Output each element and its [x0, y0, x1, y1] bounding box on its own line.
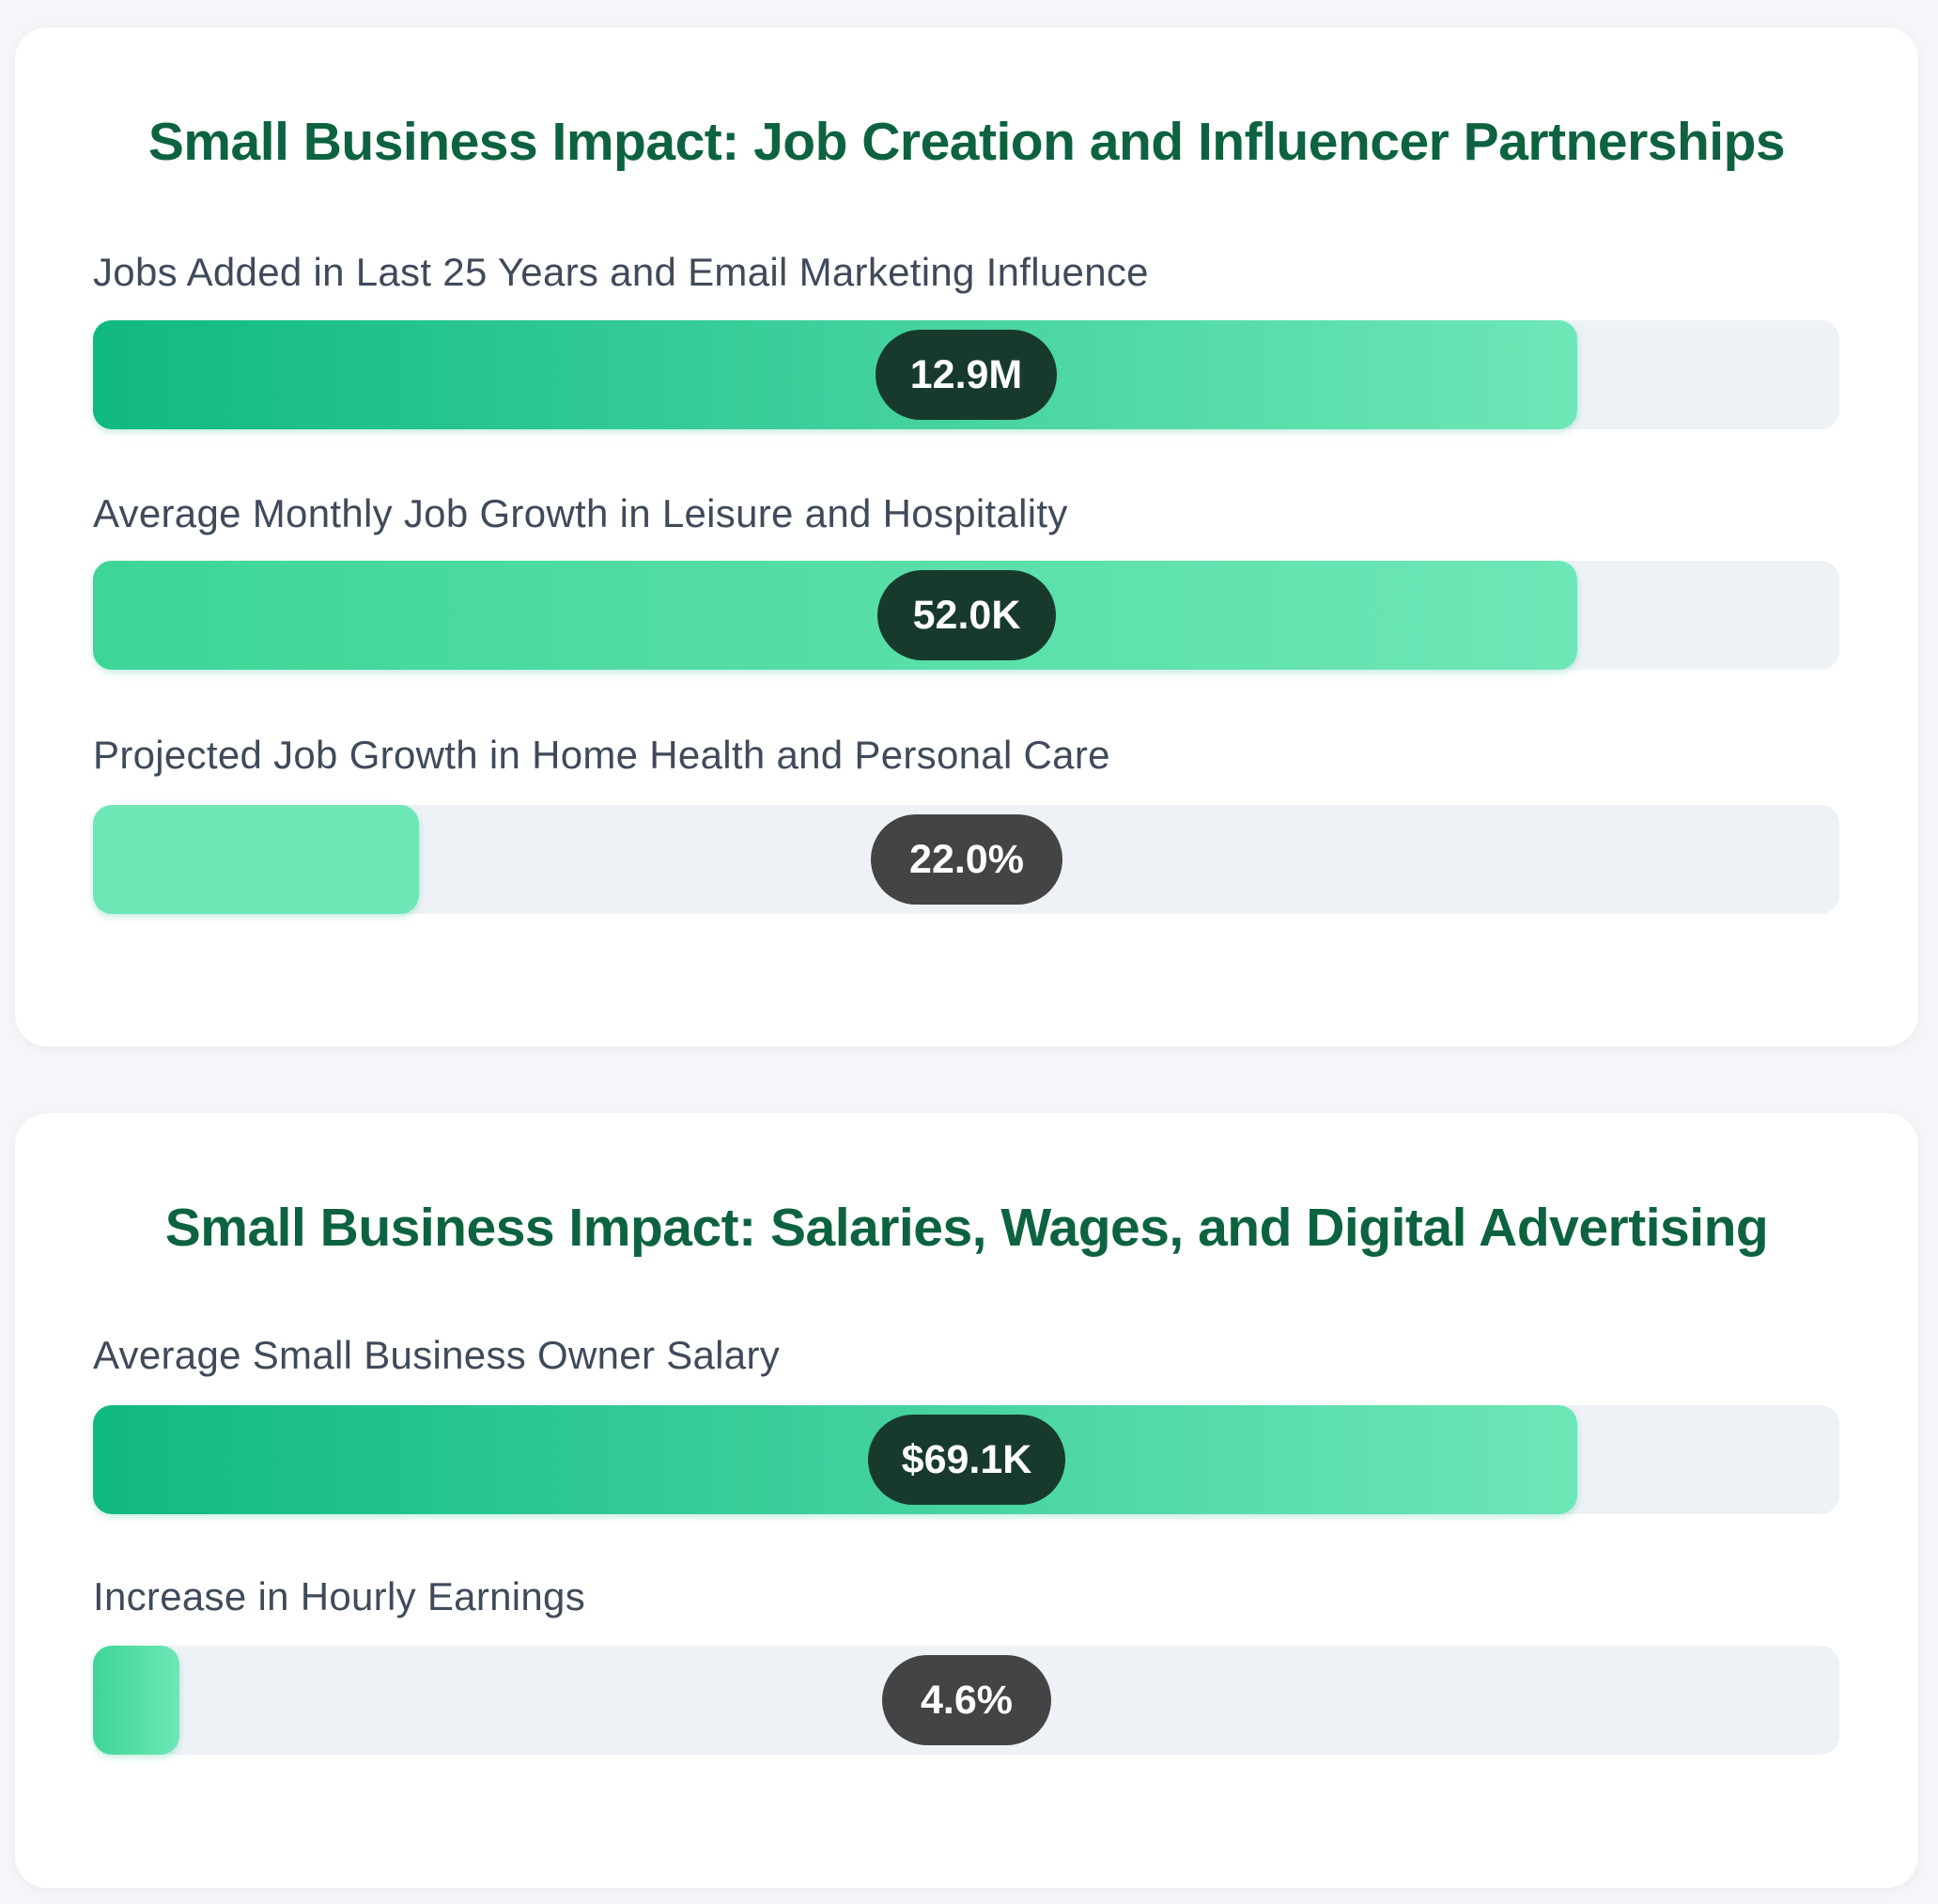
bar: 4.6%	[93, 1646, 1839, 1755]
title: Small Business Impact: Salaries, Wages, and Digital Advertising	[165, 1198, 1768, 1258]
bar: 52.0K: 52.0K	[913, 593, 1020, 638]
bar: $69.1K	[93, 1405, 1839, 1514]
bar: 22.0%: 22.0%	[909, 837, 1024, 882]
title: Small Business Impact: Job Creation and Influencer Partnerships	[148, 112, 1785, 172]
bar: 22.0%	[93, 805, 1839, 914]
label: jobs added: Jobs Added in Last 25 Years and Email Marketing Influence	[93, 250, 1149, 294]
label: home health: Projected Job Growth in Home Health and Personal Care	[93, 733, 1110, 777]
bar: 12.9M: 12.9M	[910, 352, 1022, 397]
label: hourly earnings: Increase in Hourly Earnings	[93, 1574, 585, 1618]
panel: salaries	[15, 1113, 1918, 1888]
bar: 12.9M	[93, 320, 1839, 429]
label: leisure: Average Monthly Job Growth in Leisure and Hospitality	[93, 491, 1068, 535]
bar: 4.6%: 4.6%	[921, 1678, 1013, 1723]
bar: 52.0K	[93, 561, 1839, 670]
panel: job creation	[15, 27, 1918, 1046]
bar: $69.1K: $69.1K	[902, 1437, 1031, 1482]
label: owner salary: Average Small Business Owner Salary	[93, 1333, 780, 1377]
